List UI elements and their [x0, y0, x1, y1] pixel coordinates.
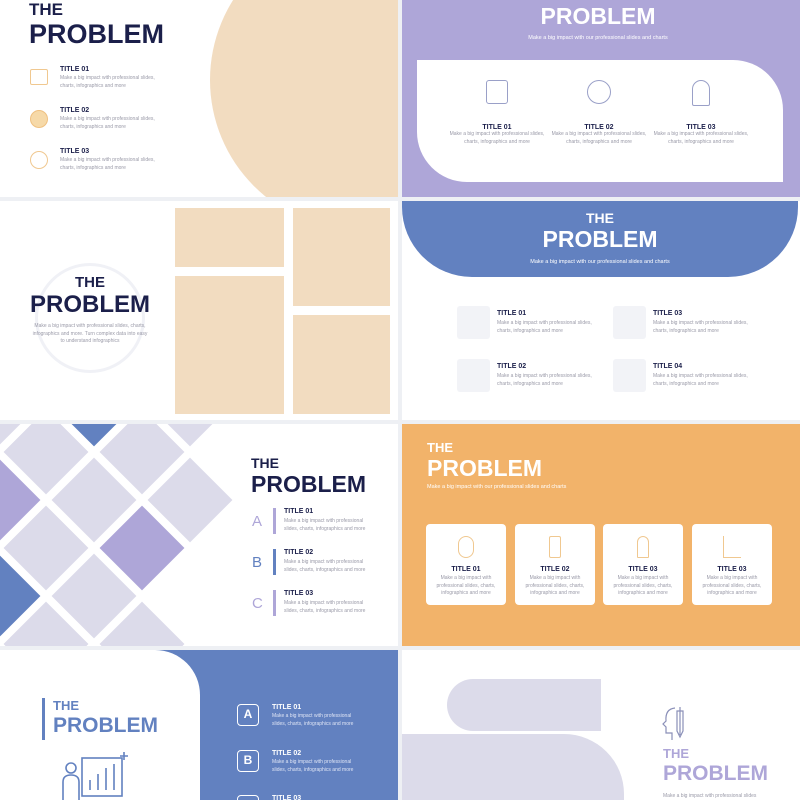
card 4: TITLE 03: [717, 566, 747, 573]
item B: Make a big impact with professional slides, charts, infographics and more: [284, 559, 365, 572]
item B: TITLE 02: [272, 750, 301, 757]
card 2: TITLE 02: [540, 566, 570, 573]
column 1: TITLE 01: [482, 124, 512, 131]
column 1: [450, 80, 544, 144]
title: PROBLEM: [540, 3, 656, 29]
item 02: Make a big impact with professional slides, charts, infographics and more: [60, 116, 155, 130]
item 01: TITLE 01: [60, 66, 89, 73]
title: PROBLEM: [542, 226, 658, 252]
slide 1: problem with peach circle: [0, 0, 398, 197]
description: Make a big impact with professional slides, charts, infographics and more. Turn complex data into easy to understand infographics: [33, 323, 147, 344]
lavender bottom shape: [402, 734, 624, 800]
title: THE: [29, 0, 63, 19]
item C: [252, 590, 366, 616]
item A: TITLE 01: [272, 704, 301, 711]
item 01: [30, 66, 155, 88]
card 1: TITLE 01: [451, 566, 481, 573]
item A: [237, 704, 354, 726]
column 3: TITLE 03: [686, 124, 716, 131]
card 3: Make a big impact with professional slides, charts, infographics and more: [614, 575, 672, 596]
item A: [252, 508, 366, 534]
title: PROBLEM: [29, 19, 164, 49]
slide 2: lavender with white card: [402, 0, 800, 197]
white rounded panel: [0, 650, 200, 800]
item C: [237, 795, 301, 800]
item B: B: [244, 753, 252, 767]
icon: team chat: [486, 80, 508, 104]
item 02: [30, 107, 155, 130]
icon: head: [692, 80, 710, 106]
title: THE: [53, 698, 79, 713]
item 03: [613, 306, 748, 339]
item C: TITLE 03: [284, 590, 313, 597]
subtitle: Make a big impact with our professional slides and charts: [427, 484, 566, 490]
item 02: TITLE 02: [60, 107, 89, 114]
title: [29, 0, 164, 49]
title: THE: [586, 210, 614, 226]
icon: coins: [30, 110, 48, 128]
title: THE: [75, 274, 105, 291]
card 1: Make a big impact with professional slides, charts, infographics and more: [437, 575, 495, 596]
column 3: [654, 80, 748, 144]
subtitle: Make a big impact with professional slides: [663, 793, 756, 799]
card 1: [426, 524, 506, 605]
icon: head with pencil: [662, 707, 684, 740]
item B: TITLE 02: [284, 549, 313, 556]
item 01: TITLE 01: [497, 310, 526, 317]
icon: presenter with chart: [62, 752, 128, 800]
title: THE: [663, 746, 689, 761]
item 01: Make a big impact with professional slides, charts, infographics and more: [60, 75, 155, 88]
column 2: [552, 80, 646, 144]
item 02: TITLE 02: [497, 363, 526, 370]
title: PROBLEM: [30, 291, 150, 318]
item C: Make a big impact with professional slides, charts, infographics and more: [284, 600, 365, 614]
title: [427, 440, 542, 481]
title: THE: [251, 455, 279, 471]
icon: gear: [587, 80, 611, 104]
card 3: TITLE 03: [628, 566, 658, 573]
icon: faint stopwatch: [35, 263, 145, 373]
white card: [417, 60, 783, 182]
title: PROBLEM: [427, 455, 542, 481]
item A: Make a big impact with professional slides, charts, infographics and more: [284, 518, 365, 532]
title: [251, 455, 366, 497]
title: PROBLEM: [251, 471, 366, 497]
column 3: Make a big impact with professional slides, charts, infographics and more: [654, 131, 748, 144]
title: [42, 698, 158, 740]
item 03: [30, 148, 155, 170]
lavender pill shape: [447, 679, 601, 731]
item 03: Make a big impact with professional slides, charts, infographics and more: [60, 157, 155, 170]
subtitle: Make a big impact with our professional slides and charts: [528, 35, 668, 41]
item 03: TITLE 03: [653, 310, 682, 317]
title: PROBLEM: [53, 714, 158, 737]
item C: C: [252, 595, 263, 612]
column 1: Make a big impact with professional slides, charts, infographics and more: [450, 131, 544, 144]
item 03: TITLE 03: [60, 148, 89, 155]
card 3: [603, 524, 683, 605]
slide 7: blue panel with A B C boxes: [0, 650, 398, 800]
card 4: Make a big impact with professional slides, charts, infographics and more: [703, 575, 761, 596]
title: PROBLEM: [663, 762, 768, 785]
item B: Make a big impact with professional slides, charts, infographics and more: [272, 759, 353, 772]
item 01: [457, 306, 592, 339]
item 04: [613, 359, 748, 392]
title: THE: [427, 440, 453, 455]
card 2: Make a big impact with professional slides, charts, infographics and more: [526, 575, 584, 596]
subtitle: Make a big impact with our professional slides and charts: [530, 259, 670, 265]
slide 5: diamond pattern with A B C: [0, 424, 398, 646]
card 2: [515, 524, 595, 605]
item B: [252, 549, 366, 575]
diamond pattern: [0, 424, 232, 646]
item 04: Make a big impact with professional slides, charts, infographics and more: [653, 373, 748, 386]
title: [30, 274, 150, 318]
item A: Make a big impact with professional slides, charts, infographics and more: [272, 713, 353, 726]
column 2: TITLE 02: [584, 124, 614, 131]
photo placeholders: [175, 208, 284, 267]
item 01: Make a big impact with professional slides, charts, infographics and more: [497, 320, 592, 334]
title: [542, 210, 658, 252]
card 4: [692, 524, 772, 605]
slide 6: orange with four cards: [402, 424, 800, 646]
column 2: Make a big impact with professional slides, charts, infographics and more: [552, 131, 646, 144]
item B: B: [252, 554, 262, 571]
item 02: Make a big impact with professional slides, charts, infographics and more: [497, 373, 592, 386]
item 04: TITLE 04: [653, 363, 682, 370]
item A: TITLE 01: [284, 508, 313, 515]
item A: A: [252, 513, 262, 530]
header band: [402, 161, 798, 277]
slide 4: blue header with four items: [402, 201, 800, 420]
icon: boxes: [30, 69, 48, 85]
icon: target: [30, 151, 48, 169]
item B: [237, 750, 354, 772]
title: [663, 746, 768, 785]
item 02: [457, 359, 592, 392]
item A: A: [244, 707, 252, 721]
item 03: Make a big impact with professional slides, charts, infographics and more: [653, 320, 748, 334]
slide 3: stopwatch with peach rectangles: [0, 201, 398, 420]
peach circle: [210, 0, 510, 230]
slide 8: lavender shapes with head icon: [402, 650, 800, 800]
